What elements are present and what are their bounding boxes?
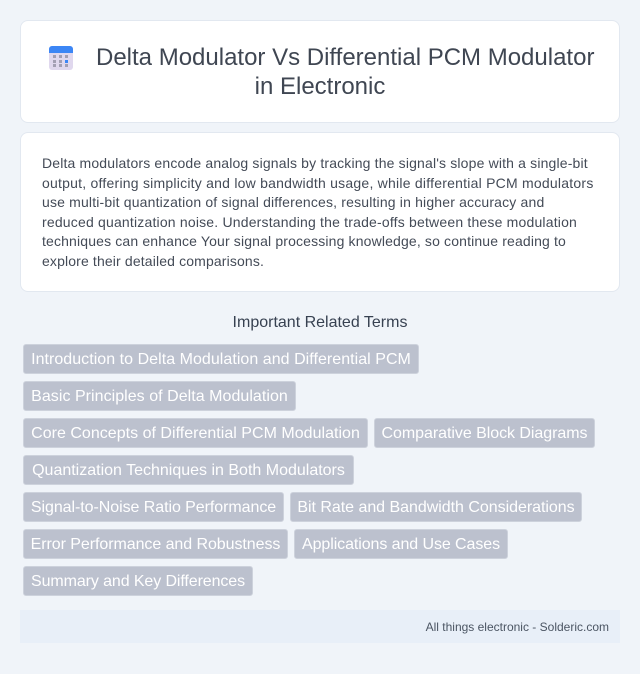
tag bbox=[23, 455, 354, 485]
tag: Comparative Block Diagrams bbox=[382, 425, 587, 442]
tag: Basic Principles of Delta Modulation bbox=[31, 388, 288, 405]
intro paragraph: Delta modulators encode analog signals by tracking the signal's slope with a single-bit bbox=[42, 155, 588, 171]
tag: Core Concepts of Differential PCM Modulation bbox=[31, 425, 360, 442]
tag: Applications and Use Cases bbox=[302, 536, 500, 553]
intro paragraph bbox=[42, 155, 594, 269]
tag: Introduction to Delta Modulation and Differential PCM bbox=[31, 351, 411, 368]
tag bbox=[294, 529, 508, 559]
tag bbox=[23, 418, 368, 448]
tag bbox=[23, 492, 284, 522]
intro text panel bbox=[20, 132, 620, 292]
tag: Error Performance and Robustness bbox=[31, 536, 280, 553]
intro paragraph: techniques can enhance Your signal processing knowledge, so continue reading to bbox=[42, 233, 566, 249]
tag: Quantization Techniques in Both Modulators bbox=[32, 462, 345, 479]
tag bbox=[23, 529, 288, 559]
tag: Signal-to-Noise Ratio Performance bbox=[31, 499, 276, 516]
tag bbox=[23, 566, 253, 596]
tag bbox=[23, 381, 296, 411]
title bbox=[96, 44, 594, 100]
tag bbox=[374, 418, 595, 448]
related terms tags bbox=[23, 344, 595, 596]
intro paragraph: explore their detailed comparisons. bbox=[42, 253, 264, 269]
tag: Summary and Key Differences bbox=[31, 573, 245, 590]
footer bbox=[20, 610, 620, 643]
header card bbox=[20, 20, 620, 123]
intro paragraph: reduced quantization noise. Understanding the trade-offs between these modulation bbox=[42, 214, 577, 230]
intro paragraph: use multi-bit quantization of signal differences, resulting in higher accuracy and bbox=[42, 194, 544, 210]
intro paragraph: output, offering simplicity and low bandwidth usage, while differential PCM modulators bbox=[42, 175, 594, 191]
title: Delta Modulator Vs Differential PCM Modulator bbox=[96, 44, 594, 71]
footer credit: All things electronic - Solderic.com bbox=[426, 620, 609, 634]
icon: calendar bbox=[49, 46, 73, 70]
title: in Electronic bbox=[255, 73, 385, 100]
tag bbox=[290, 492, 582, 522]
tag bbox=[23, 344, 419, 374]
related terms heading: Important Related Terms bbox=[233, 314, 407, 331]
tag: Bit Rate and Bandwidth Considerations bbox=[297, 499, 575, 516]
